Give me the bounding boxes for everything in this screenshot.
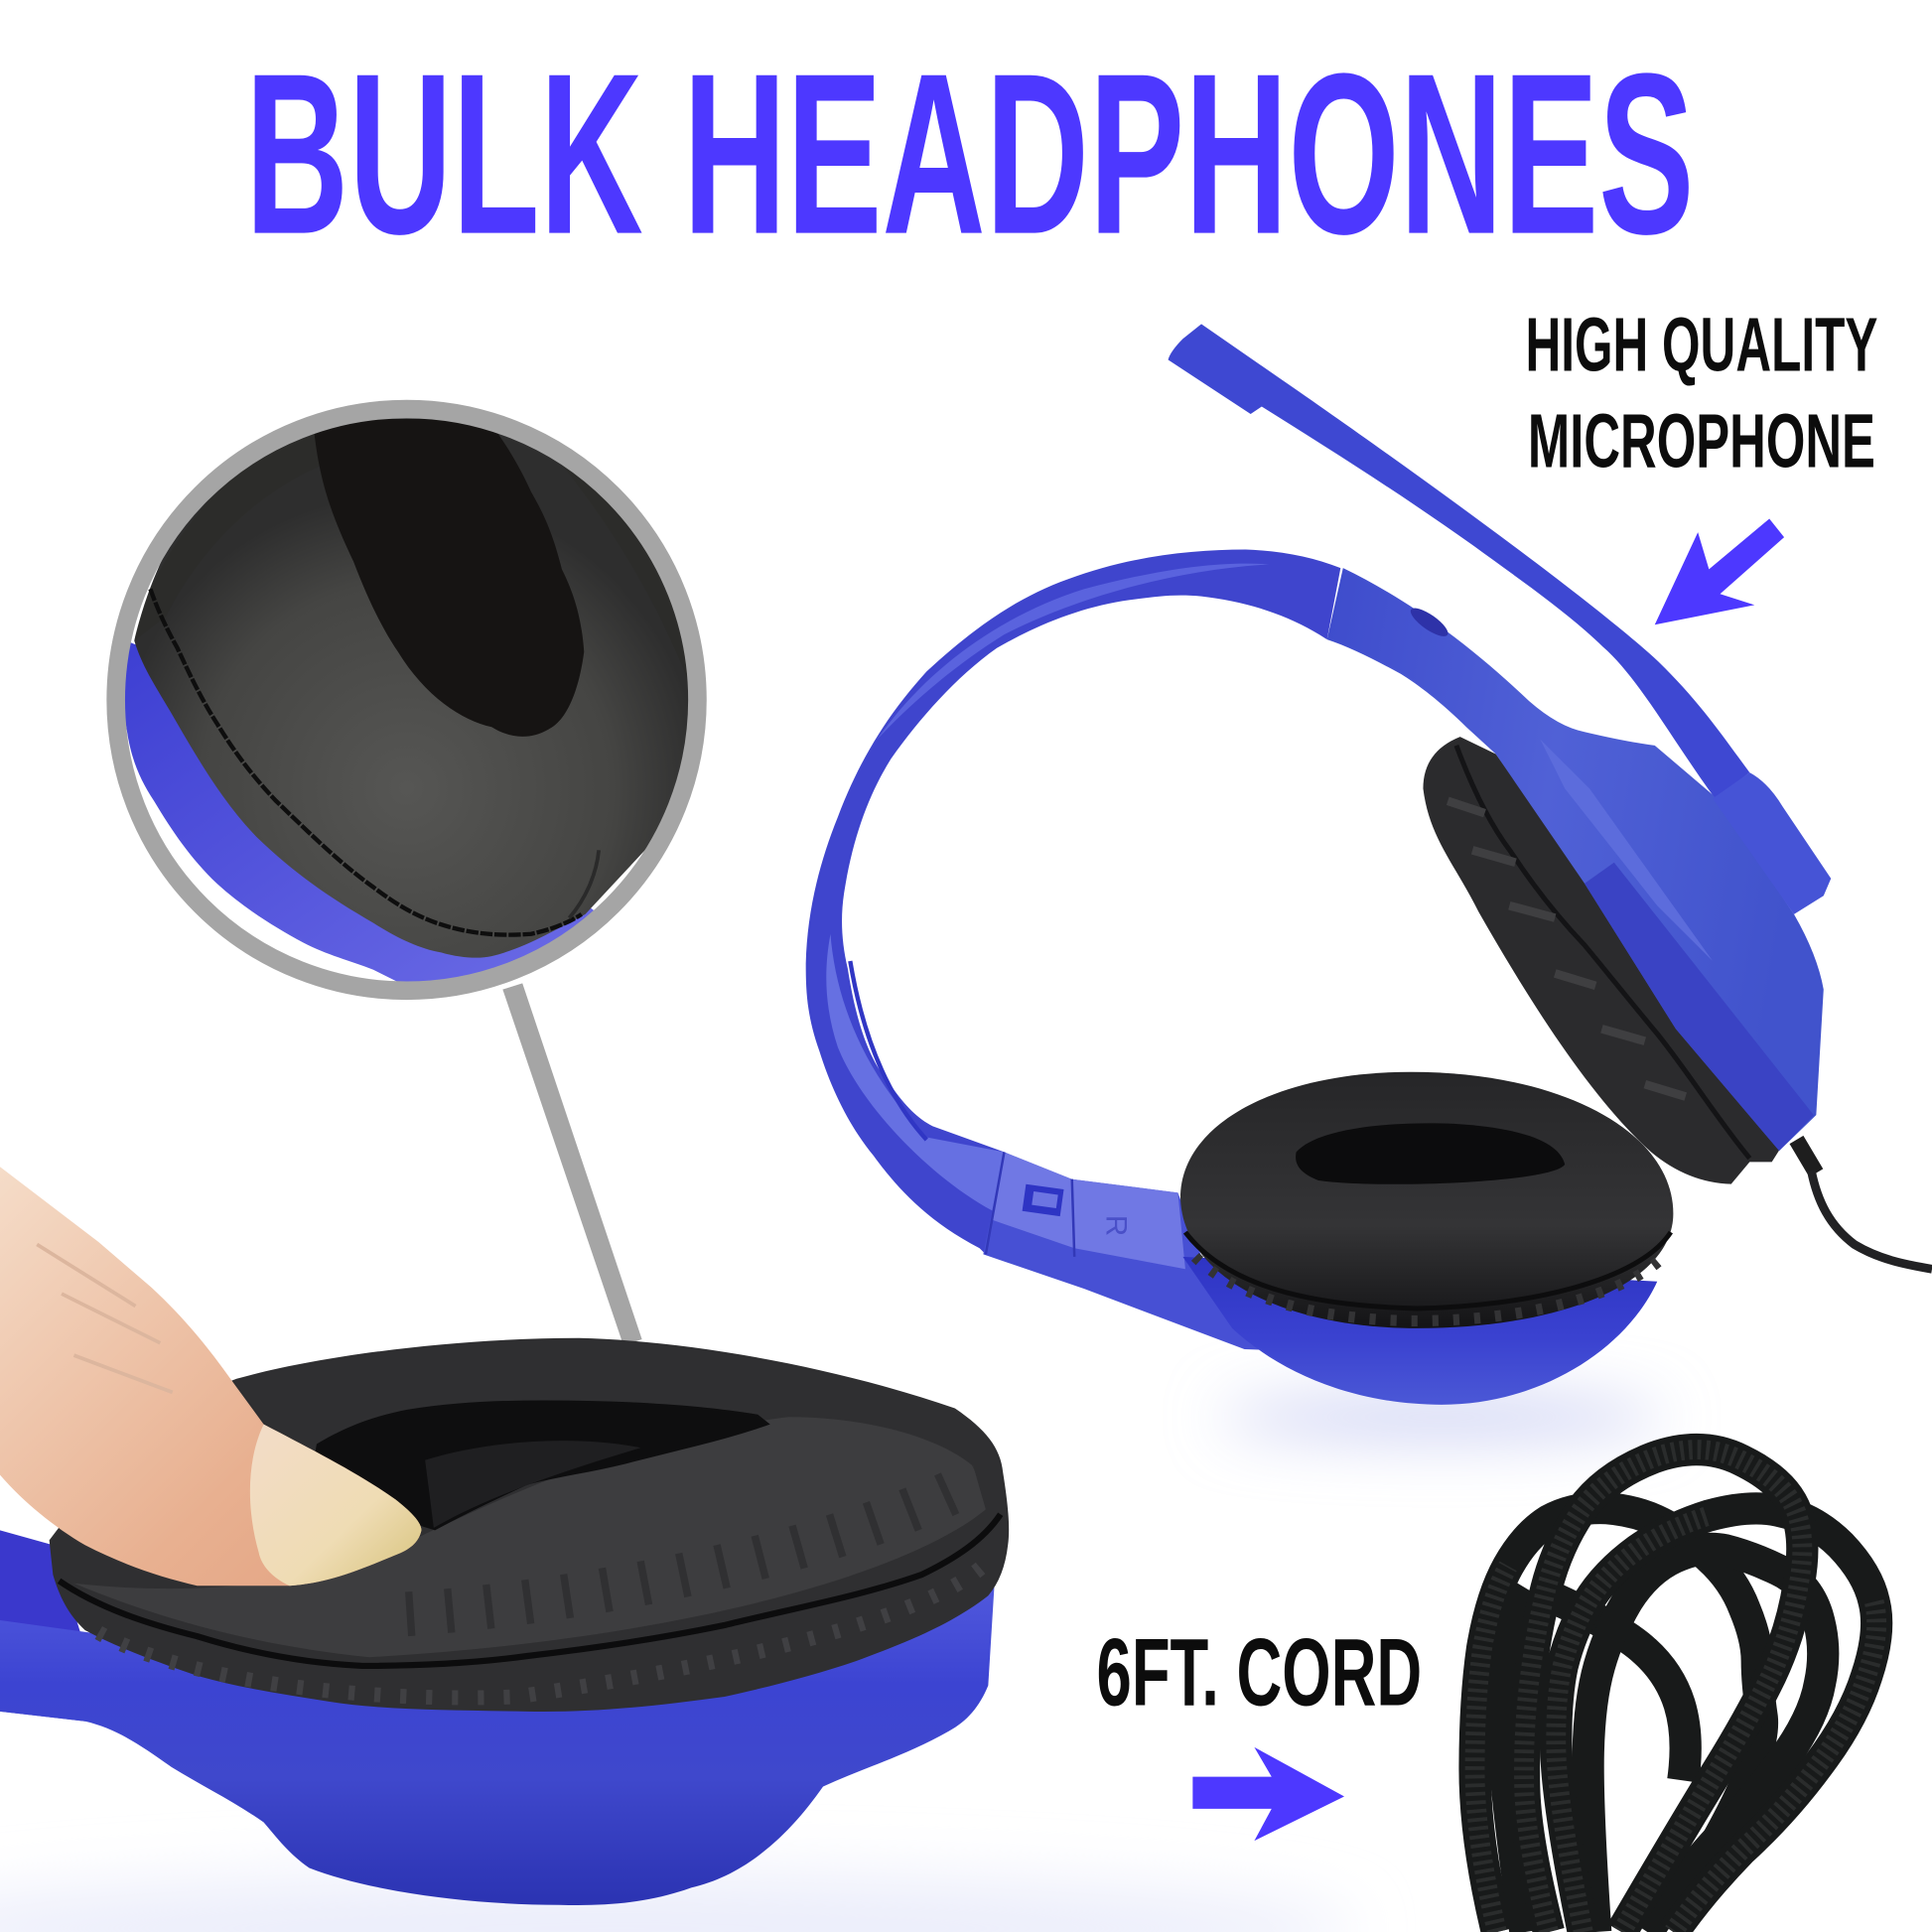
band inner highlight: [826, 934, 1004, 1213]
pad dark edges: [134, 616, 141, 641]
arrow: to microphone: [1655, 518, 1784, 624]
wrinkles on upper pad: [1448, 801, 1686, 1097]
upper ear pad: [1423, 737, 1780, 1184]
housing shade stripe: [1585, 863, 1814, 1151]
pad inner hole: [308, 1401, 770, 1530]
magnifier: ear pad detail: [111, 394, 702, 991]
headset: right product: R: [1099, 1215, 1132, 1236]
headband: [806, 550, 1340, 1254]
band slot: [850, 961, 926, 1140]
soft shadows: [0, 1397, 1663, 1932]
slider notch: [1407, 604, 1451, 641]
arrow: to cord: [1192, 1747, 1344, 1841]
ear pad: [50, 1338, 1009, 1712]
mic boss: [1713, 772, 1831, 914]
pad wrinkles: [98, 1555, 993, 1698]
magnifier pointer line: [502, 983, 642, 1345]
band stub: [0, 1530, 148, 1722]
label: 6ft cord: 6FT. CORD: [1097, 1618, 1422, 1726]
slider and cup housing: [1327, 568, 1824, 1151]
lower ear pad: [1180, 1072, 1673, 1328]
slider details: [986, 1152, 1074, 1257]
lower band connector: [983, 1152, 1340, 1353]
blue strip: [111, 634, 604, 986]
lower cup blue base: [1182, 1257, 1657, 1405]
blue cup base: [0, 1586, 995, 1905]
icon: finger: [0, 1167, 421, 1586]
headset: right product: [806, 324, 1932, 1405]
label: high quality microphone: [1525, 303, 1877, 483]
headset cable: [1796, 1140, 1816, 1173]
pad seam: [60, 1514, 1001, 1666]
pad lower lip highlight: [73, 1417, 986, 1657]
earcup: front closeup with finger: [0, 1167, 1009, 1905]
fingernail: [250, 1425, 421, 1586]
pad surface: [134, 394, 702, 958]
pad seam: [150, 589, 582, 935]
braided cord coil: [1475, 1449, 1876, 1932]
microphone boom: [1169, 324, 1749, 798]
pad inner hole: [313, 419, 584, 737]
finger wrinkles: [37, 1244, 173, 1392]
